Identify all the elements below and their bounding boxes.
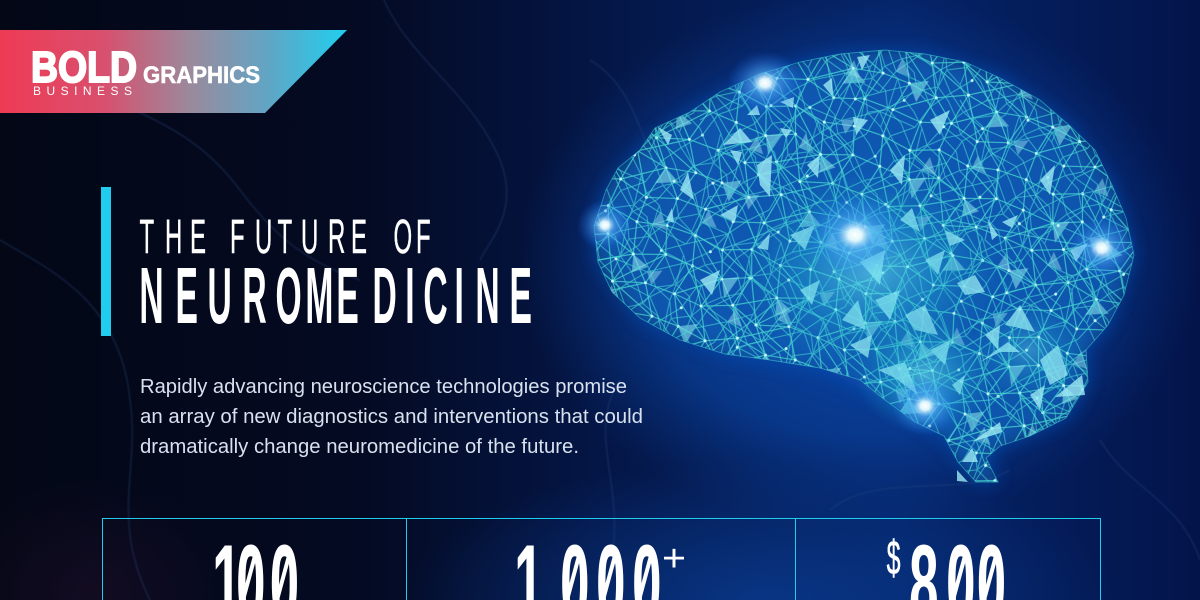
stat: $800 <box>886 538 1004 600</box>
bright triangles <box>658 55 1088 482</box>
neural network brain illustration <box>577 45 1140 485</box>
intro paragraph <box>140 376 643 458</box>
title block <box>101 187 532 341</box>
stat: 100 <box>216 544 297 600</box>
title line one: THE FUTURE OF <box>140 211 431 264</box>
logo: Bold Business: BUSINESS <box>33 84 132 98</box>
logo: Bold Business: BOLD <box>31 43 137 92</box>
intro paragraph: an array of new diagnostics and interventions that could <box>140 406 643 428</box>
stat: 1,000+ <box>518 544 684 600</box>
brain outline nodes <box>594 50 1134 482</box>
light flares <box>577 51 1136 436</box>
brain blue base glow <box>594 54 1134 482</box>
stat: 1,000+: + <box>662 538 686 580</box>
brain mesh <box>590 45 1140 485</box>
intro paragraph: Rapidly advancing neuroscience technologies promise <box>140 376 627 398</box>
logo banner <box>0 30 347 113</box>
table frame <box>102 518 1100 600</box>
intro paragraph: dramatically change neuromedicine of the future. <box>140 436 579 458</box>
title accent bar <box>101 187 111 336</box>
central haze <box>740 170 1000 370</box>
stat: $800: $ <box>887 531 900 585</box>
logo: Graphics: GRAPHICS <box>143 62 260 89</box>
title line two: NEUROMEDICINE <box>139 251 532 341</box>
stats table <box>102 518 1100 600</box>
